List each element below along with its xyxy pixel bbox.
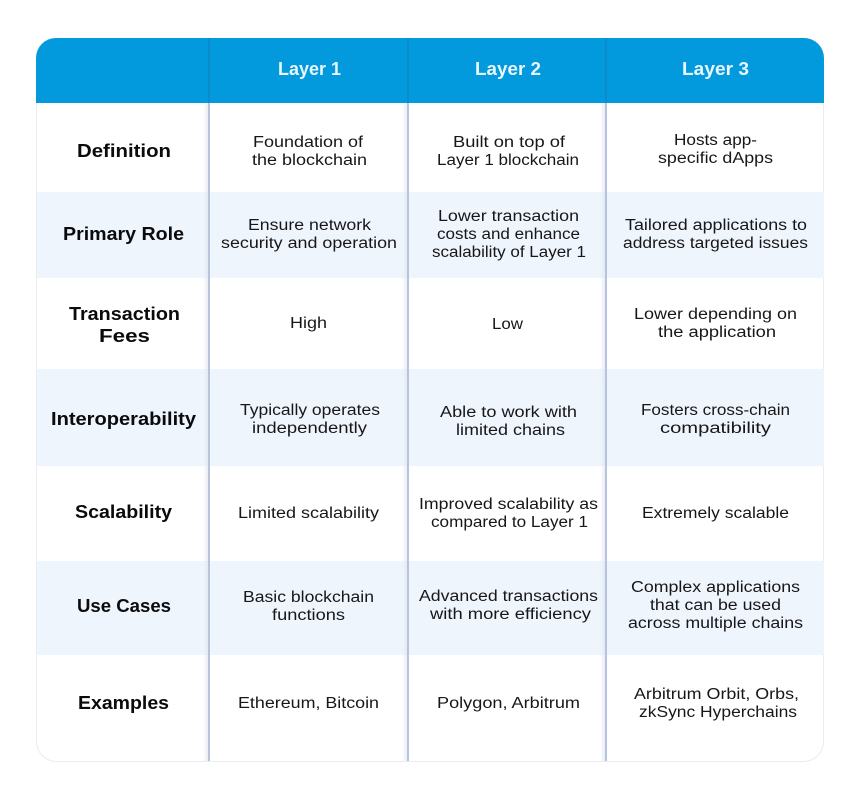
- layer 1 cell: Ensure network: [248, 217, 371, 234]
- layer 3 cell: [634, 686, 799, 721]
- layer 2 cell: [437, 134, 579, 169]
- layer 3 cell: [641, 402, 790, 437]
- layer 2 cell: [440, 404, 577, 439]
- row: Interoperability: [51, 402, 790, 439]
- layer 2 cell: Able to work with: [440, 404, 577, 421]
- layer 3 cell: [658, 132, 773, 167]
- row label: Scalability: [75, 501, 173, 522]
- layer 1 cell: independently: [252, 420, 367, 437]
- layer 2 cell: Polygon, Arbitrum: [437, 695, 580, 712]
- layer 2 cell: [419, 496, 598, 531]
- layer 1 cell: Foundation of: [253, 134, 364, 151]
- layer 3 cell: [634, 306, 797, 341]
- row: Use Cases: [77, 579, 803, 632]
- row: Definition: [77, 132, 773, 169]
- layer 1 cell: functions: [272, 607, 345, 624]
- layer 2 cell: limited chains: [456, 422, 565, 439]
- layer 3 cell: [628, 579, 803, 632]
- layer 3 cell: across multiple chains: [628, 615, 803, 632]
- layer 2 cell: compared to Layer 1: [431, 514, 588, 531]
- row: Scalability: [75, 496, 789, 531]
- layer 3 cell: address targeted issues: [623, 235, 808, 252]
- row: Primary Role: [63, 208, 808, 261]
- layer 2 cell: Built on top of: [453, 134, 566, 151]
- layer 1 cell: [252, 134, 367, 169]
- heading: Layer 1: Layer 1: [278, 59, 341, 79]
- layer 3 cell: compatibility: [660, 420, 771, 437]
- layer 1 cell: [221, 217, 397, 252]
- layer 1 cell: [243, 589, 374, 624]
- row label: Examples: [78, 692, 169, 713]
- layer 3 cell: zkSync Hyperchains: [639, 704, 797, 721]
- layer 3 cell: Tailored applications to: [625, 217, 807, 234]
- layer 3 cell: Hosts app-: [674, 132, 757, 149]
- row: Examples: [78, 686, 799, 721]
- layer 3 cell: Arbitrum Orbit, Orbs,: [634, 686, 799, 703]
- layer 2 cell: with more efficiency: [429, 606, 591, 623]
- layer 3 cell: Fosters cross-chain: [641, 402, 790, 419]
- heading: Layer 3: Layer 3: [682, 59, 749, 79]
- layer 3 cell: Complex applications: [631, 579, 800, 596]
- layer 1 cell: Ethereum, Bitcoin: [238, 695, 379, 712]
- layer 2 cell: Advanced transactions: [419, 588, 598, 605]
- layer 1 cell: [240, 402, 380, 437]
- layer 1 cell: security and operation: [221, 235, 397, 252]
- layer 1 cell: High: [290, 315, 327, 332]
- header row: [278, 59, 749, 79]
- row label: Transaction: [69, 303, 180, 324]
- layer 2 cell: scalability of Layer 1: [432, 244, 586, 261]
- row label: [69, 303, 180, 346]
- row label: Definition: [77, 140, 171, 161]
- layer 1 cell: Basic blockchain: [243, 589, 374, 606]
- layer 2 cell: Layer 1 blockchain: [437, 152, 579, 169]
- layer 3 cell: the application: [658, 324, 776, 341]
- layer 3 cell: Extremely scalable: [642, 505, 789, 522]
- layer 2 cell: Low: [492, 316, 524, 333]
- heading: Layer 2: Layer 2: [475, 59, 541, 79]
- layer 2 cell: Improved scalability as: [419, 496, 598, 513]
- layer 2 cell: [419, 588, 598, 623]
- layer 3 cell: [623, 217, 808, 252]
- layer 1 cell: Typically operates: [240, 402, 380, 419]
- layer 2 cell: Lower transaction: [438, 208, 579, 225]
- row label: Interoperability: [51, 408, 197, 429]
- layer 3 cell: specific dApps: [658, 150, 773, 167]
- row label: Primary Role: [63, 223, 184, 244]
- layer 2 cell: costs and enhance: [437, 226, 580, 243]
- row: Transaction Fees: [69, 303, 797, 346]
- layer 3 cell: Lower depending on: [634, 306, 797, 323]
- layer 2 cell: [432, 208, 586, 261]
- layer 1 cell: Limited scalability: [238, 505, 379, 522]
- layer 3 cell: that can be used: [650, 597, 781, 614]
- row label: Fees: [99, 325, 150, 346]
- layer 1 cell: the blockchain: [252, 152, 367, 169]
- row label: Use Cases: [77, 595, 171, 616]
